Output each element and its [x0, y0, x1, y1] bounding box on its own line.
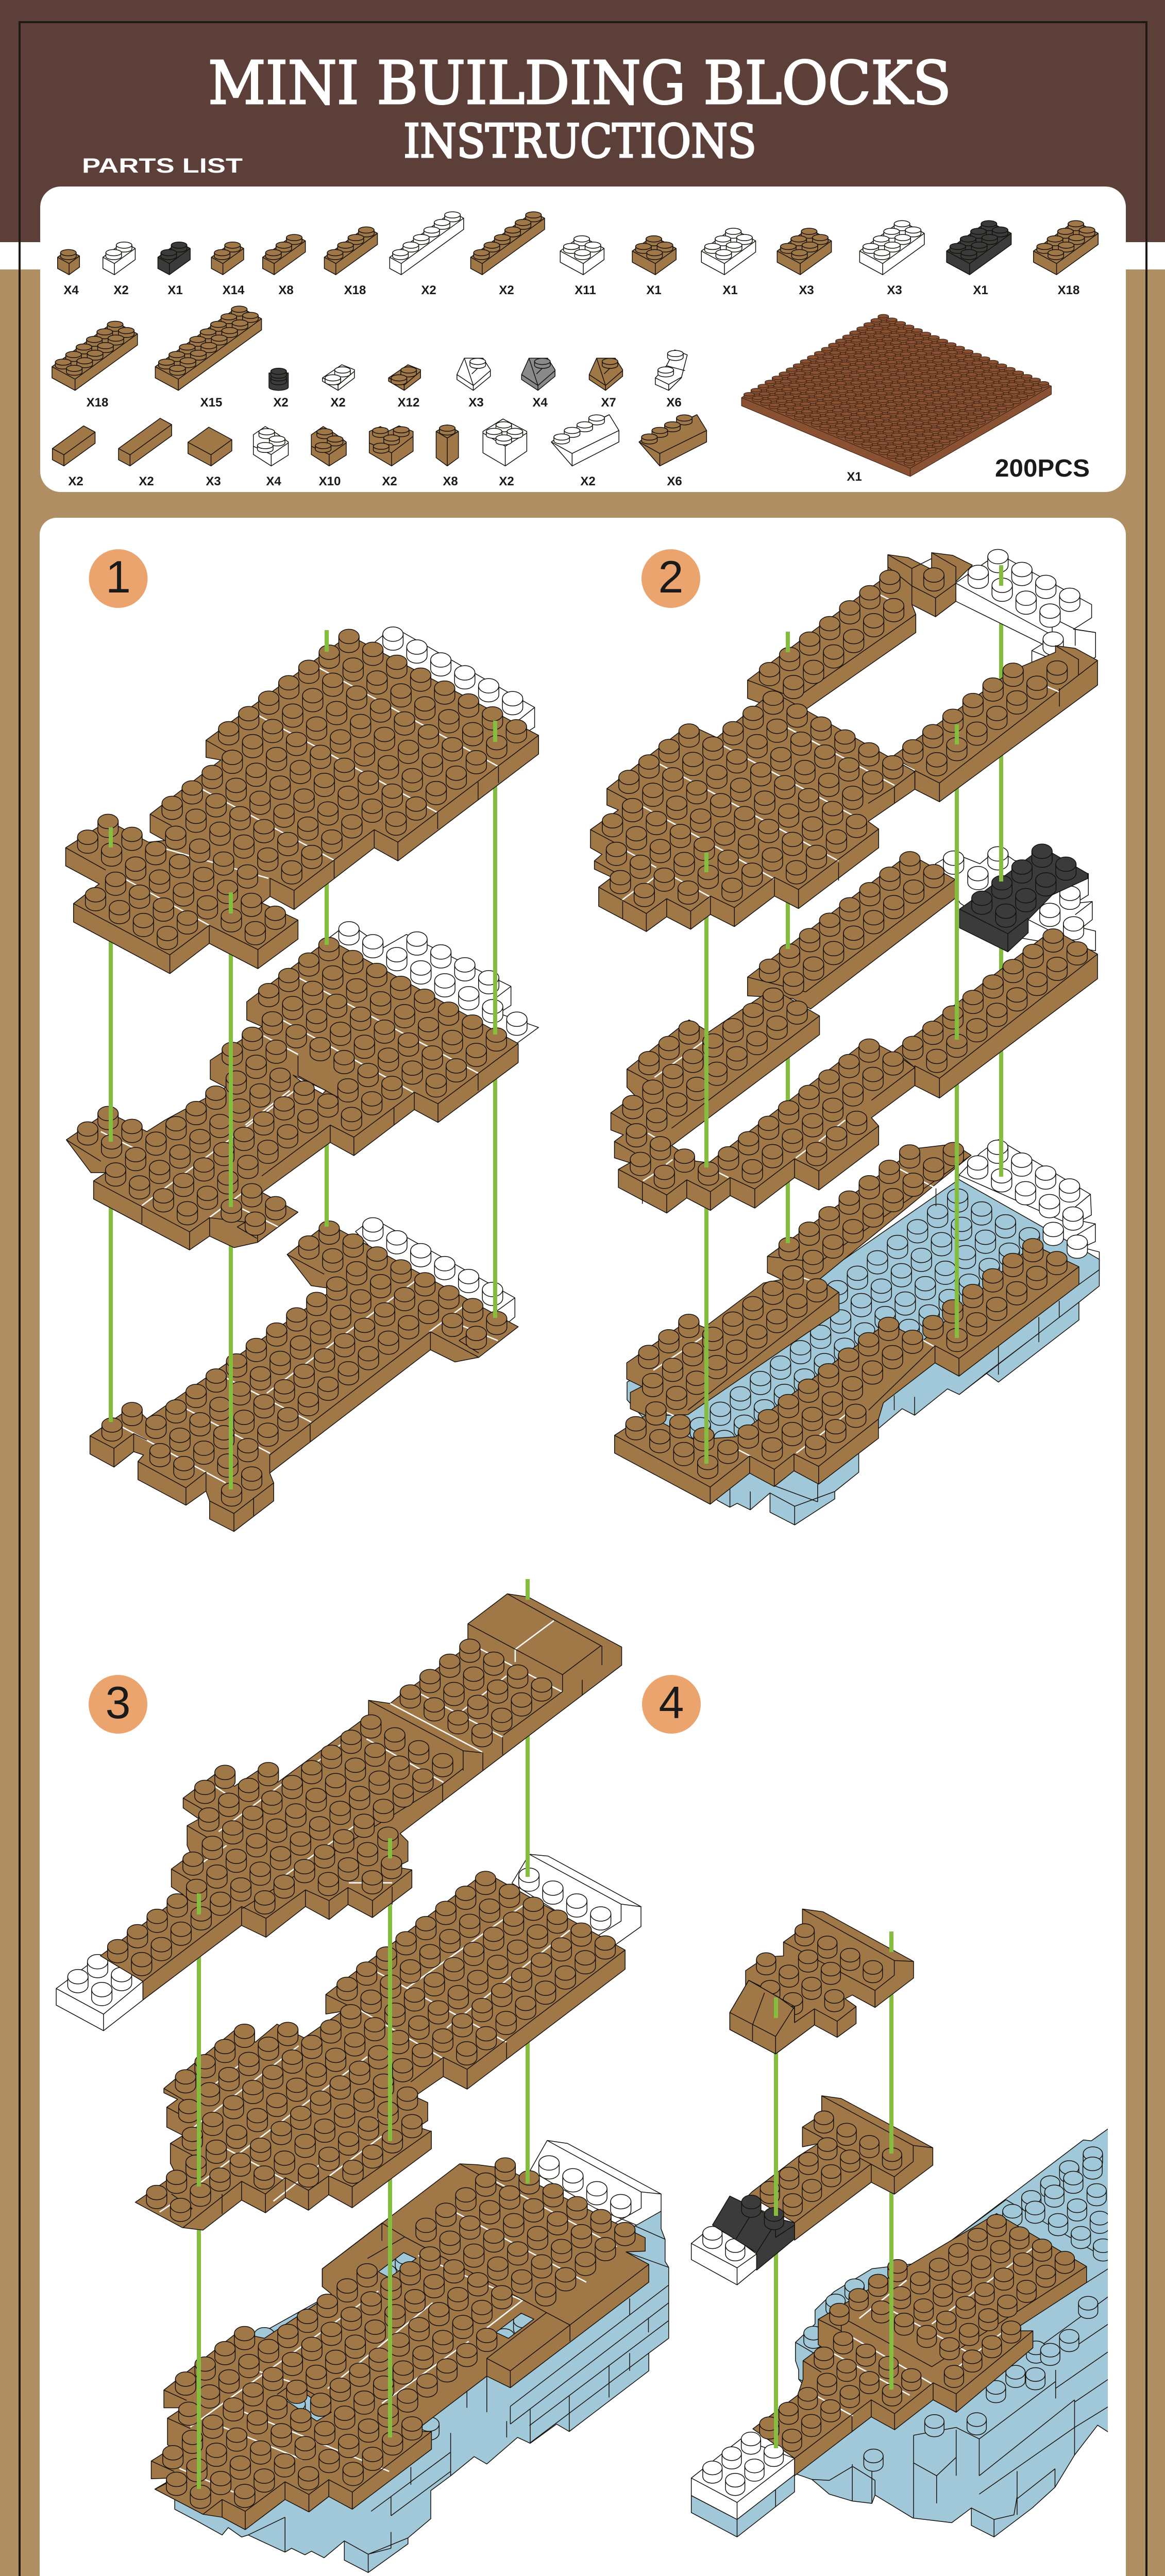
white strip behind parts panel: [0, 242, 1165, 269]
step 3 middle layer: [136, 1854, 641, 2230]
connectors: step 2 lower: [706, 938, 1001, 1464]
connectors: step 1 upper: [111, 775, 495, 1207]
step 3 top layer: [56, 1594, 622, 2031]
part quantity labels: X12: [398, 396, 419, 410]
part quantity labels: X8: [278, 283, 294, 297]
part quantity labels: X1: [973, 283, 988, 297]
part quantity labels: X4: [532, 396, 548, 410]
part quantity labels: X18: [344, 283, 366, 297]
part quantity labels: X4: [63, 283, 79, 297]
step 2 badge: [641, 549, 700, 608]
part quantity labels: X11: [575, 283, 596, 297]
part quantity labels: X14: [223, 283, 245, 297]
step 2 assembly: [590, 549, 1099, 1525]
step 2 bottom layer: [615, 1140, 1099, 1525]
part quantity labels: [63, 283, 1079, 488]
part quantity labels: X2: [139, 474, 154, 488]
connectors: step 1 lower: [111, 1066, 495, 1489]
part quantity labels: X2: [273, 396, 289, 410]
step 2 top layer: [590, 549, 1098, 931]
part quantity labels: X15: [200, 396, 222, 410]
step 1 badge: 1: [106, 551, 131, 602]
part quantity labels: X6: [667, 474, 682, 488]
step 1 badge: [89, 549, 147, 608]
step 4 assembly: [691, 1909, 1112, 2537]
connectors: step 4 lower: [776, 2184, 891, 2448]
step 3 assembly: [56, 1579, 669, 2572]
step 1 assembly: [65, 627, 538, 1532]
step 1 top layer: [65, 627, 538, 974]
step 4 middle layer: [691, 2096, 933, 2285]
part quantity labels: X18: [1058, 283, 1079, 297]
step 2 middle layer: [611, 844, 1098, 1213]
step 4 bottom layer: model body: [691, 2126, 1112, 2537]
part quantity labels: X2: [113, 283, 129, 297]
baseplate: [741, 314, 1051, 477]
part quantity labels: X2: [421, 283, 436, 297]
part quantity labels: X1: [847, 470, 862, 484]
piece count: 200PCS: [995, 455, 1090, 482]
connector stubs: step 1: [111, 630, 495, 913]
part quantity labels: X2: [68, 474, 83, 488]
part quantity labels: X2: [499, 283, 514, 297]
part quantity labels: X1: [646, 283, 662, 297]
part quantity labels: X7: [601, 396, 616, 410]
connector stubs: step 3: [199, 1579, 528, 1914]
subtitle: INSTRUCTIONS: [403, 114, 756, 168]
step 1 middle layer: [66, 922, 538, 1250]
connector stubs: step 2: [706, 565, 1001, 872]
step 3 badge: [89, 1675, 147, 1734]
part quantity labels: X3: [468, 396, 484, 410]
step 2 badge: 2: [659, 551, 683, 602]
part quantity labels: X2: [330, 396, 346, 410]
connectors: step 2 upper: [706, 616, 1001, 1167]
title: MINI BUILDING BLOCKS: [208, 49, 951, 118]
part quantity labels: X2: [580, 474, 596, 488]
step 4 badge: [642, 1675, 701, 1734]
step 4 top layer: [730, 1909, 914, 2054]
part quantity labels: X10: [319, 474, 341, 488]
panel: building steps: [40, 518, 1126, 2576]
step 3 badge: 3: [106, 1677, 130, 1728]
part quantity labels: X3: [206, 474, 221, 488]
connectors: step 3 upper: [199, 1726, 528, 2187]
panel: parts list: [40, 187, 1126, 492]
connector stubs: step 4: [776, 1931, 891, 2018]
part quantity labels: X1: [167, 283, 183, 297]
part quantity labels: X1: [722, 283, 738, 297]
connectors: step 3 lower: [199, 2030, 528, 2489]
connectors: step 4 upper: [776, 1986, 891, 2216]
part quantity labels: X2: [382, 474, 397, 488]
part quantity labels: X4: [266, 474, 281, 488]
step 3 bottom layer: [151, 2141, 669, 2572]
part quantity labels: X8: [443, 474, 458, 488]
header band: [0, 0, 1165, 242]
part quantity labels: X6: [666, 396, 682, 410]
parts illustrations: [52, 212, 1098, 466]
part quantity labels: X18: [87, 396, 108, 410]
step 1 bottom layer: [90, 1218, 518, 1532]
heading: parts list: PARTS LIST: [82, 155, 243, 177]
part quantity labels: X2: [499, 474, 514, 488]
part quantity labels: X3: [799, 283, 814, 297]
step 4 badge: 4: [659, 1677, 684, 1728]
part quantity labels: X3: [887, 283, 902, 297]
